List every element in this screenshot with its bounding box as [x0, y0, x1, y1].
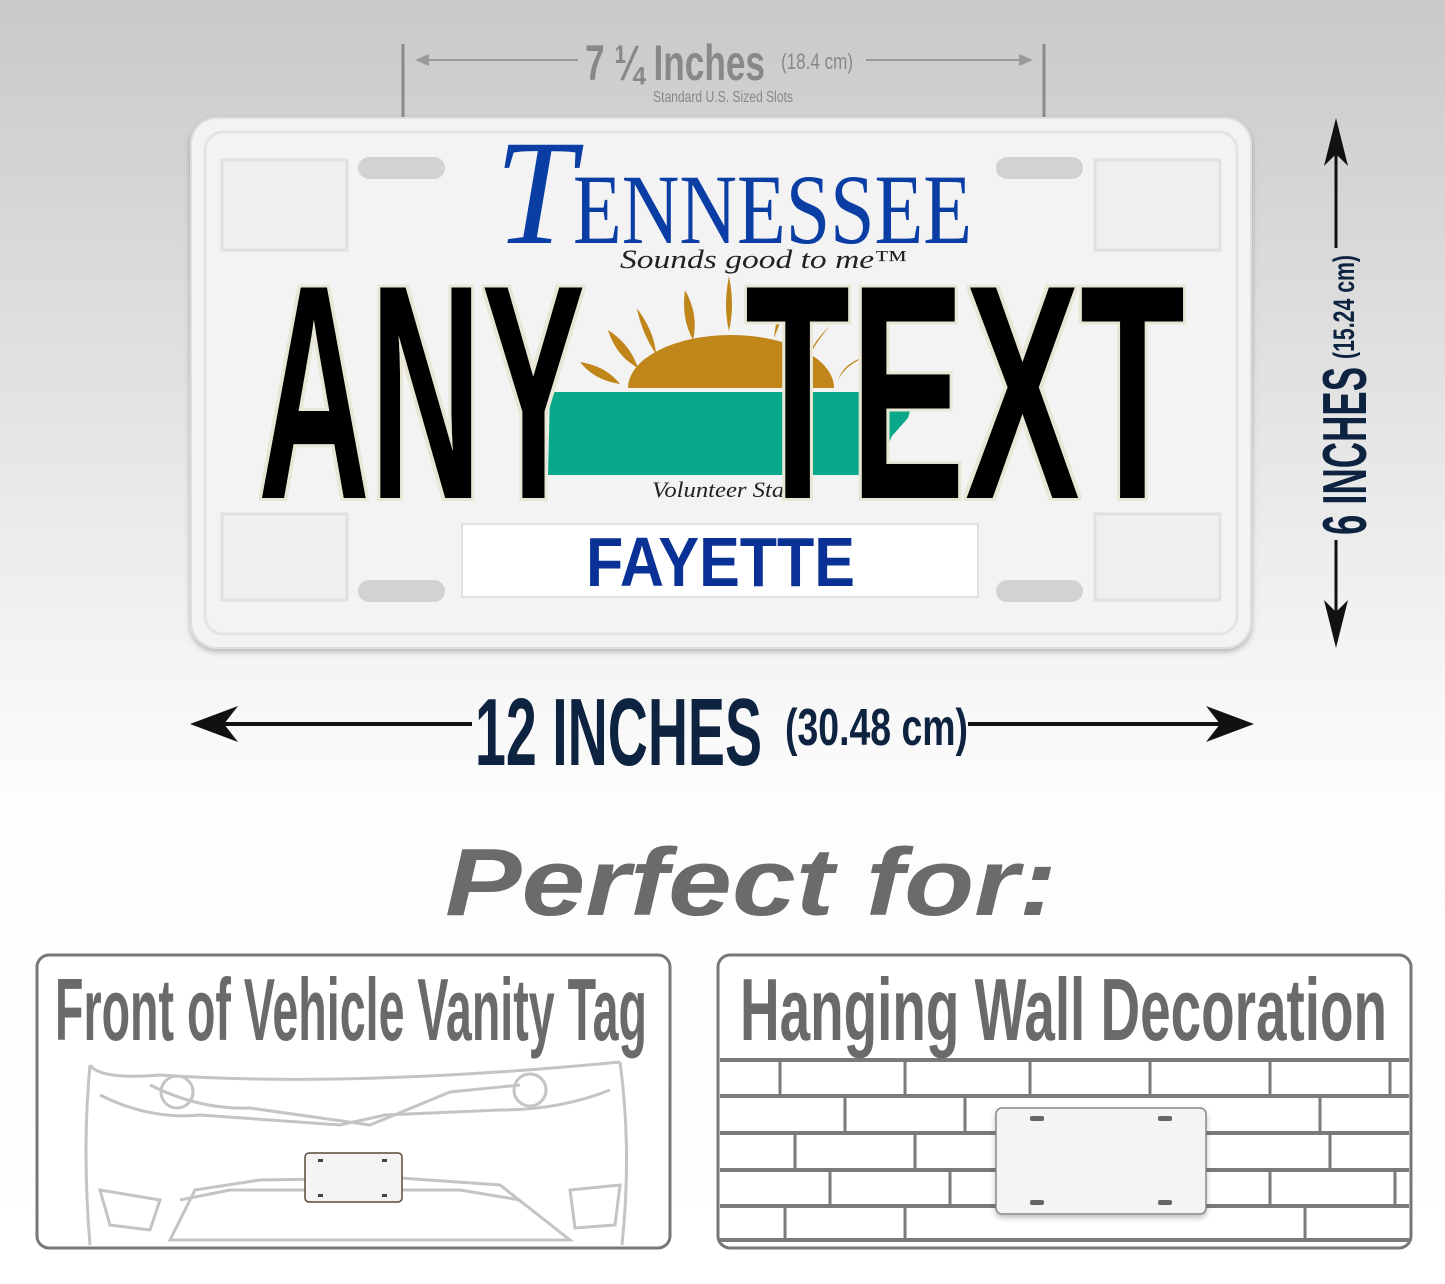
- horizontal dimension: 12 inches: [190, 679, 1254, 786]
- horizontal dimension: 12 inches: (30.48 cm): [785, 699, 968, 757]
- county strip: FAYETTE: [586, 523, 855, 601]
- mini plate: [305, 1153, 402, 1202]
- license plate: [191, 110, 1251, 648]
- panel title: Front of Vehicle Vanity Tag: [55, 960, 647, 1059]
- license plate: Volunteer State: [652, 477, 802, 502]
- horizontal dimension: 12 inches: 12 INCHES: [475, 679, 762, 786]
- brick wall: [720, 1060, 1409, 1240]
- TENNESSEE logo: T: [495, 110, 584, 276]
- TENNESSEE logo: [495, 110, 972, 276]
- slogan: Sounds good to me™: [620, 245, 907, 274]
- top dimension: slot spacing: 7 ¼ Inches: [585, 35, 765, 91]
- TENNESSEE logo: ENNESSEE: [573, 154, 972, 265]
- mounting slots: [358, 157, 1083, 602]
- plate main text: ANY: [258, 221, 585, 563]
- heading: Perfect for: Perfect for:: [445, 829, 1057, 936]
- plate main text: [258, 221, 1185, 563]
- embossed corner panels: [222, 160, 1220, 600]
- panel: wall decoration: [718, 955, 1411, 1248]
- top dimension: slot spacing: Standard U.S. Sized Slots: [653, 89, 793, 106]
- panel: front of vehicle: [37, 955, 670, 1248]
- county strip: [462, 523, 978, 601]
- Tennessee state shape: [548, 392, 912, 475]
- car outline illustration: [86, 1062, 627, 1245]
- sun and rays: [580, 276, 868, 388]
- vertical dimension: 6 inches: [1311, 118, 1380, 648]
- top dimension: slot spacing: [403, 35, 1044, 176]
- wall plate: [996, 1108, 1206, 1214]
- top dimension: slot spacing: (18.4 cm): [781, 49, 853, 74]
- vertical dimension: 6 inches: 6 INCHES: [1311, 367, 1380, 535]
- vertical dimension: 6 inches: (15.24 cm): [1328, 255, 1361, 359]
